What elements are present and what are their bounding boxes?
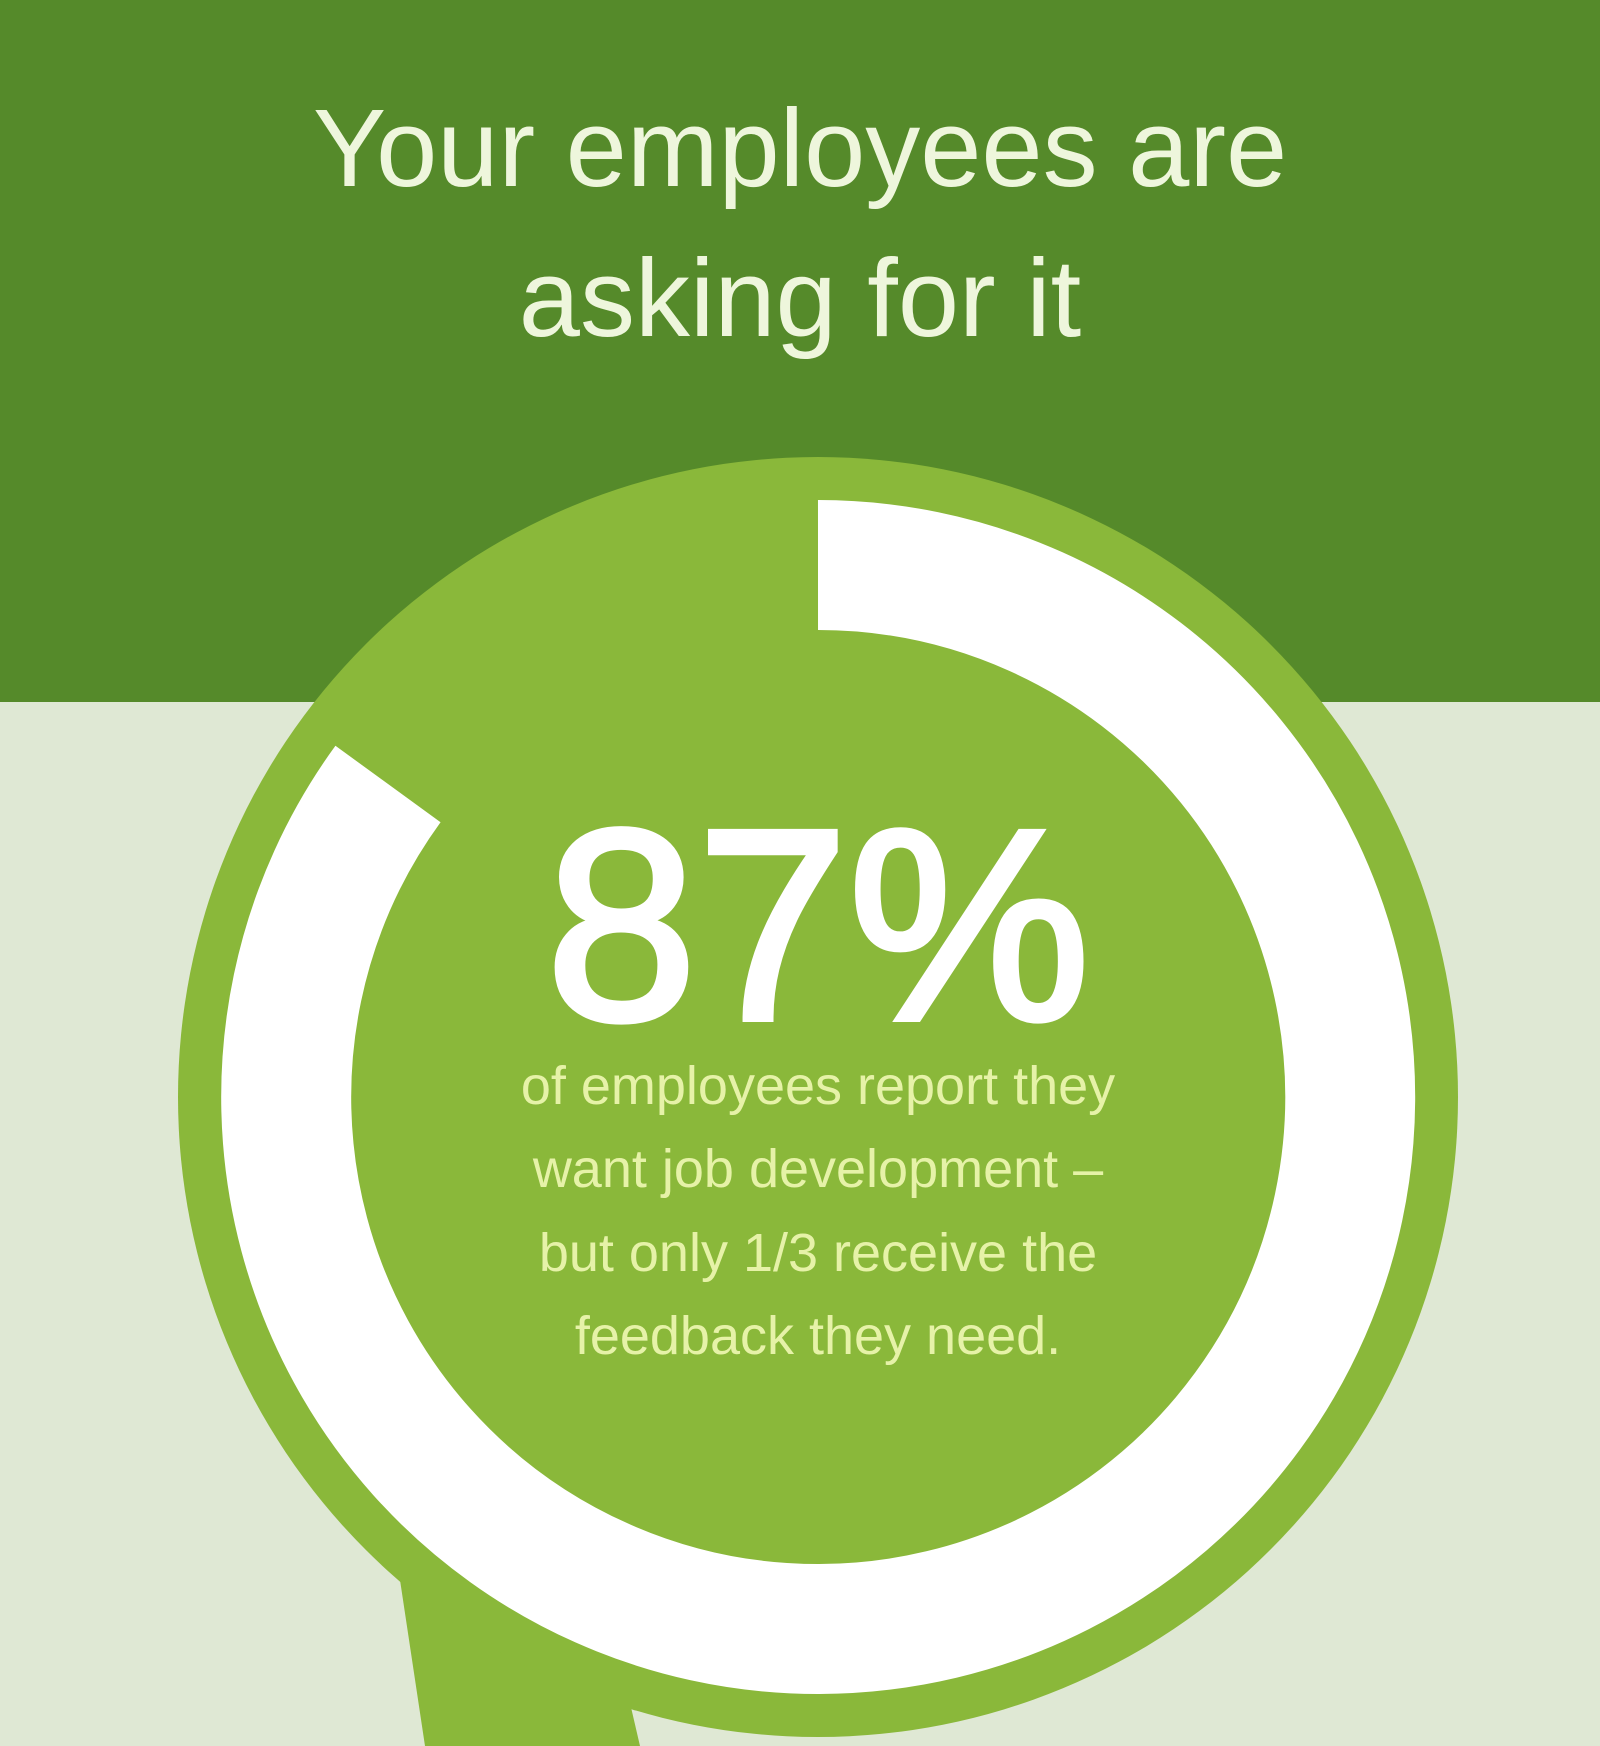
bubble tail <box>400 1580 640 1746</box>
description text: of employees report they <box>521 1056 1115 1116</box>
progress ring 87% <box>286 565 1350 1629</box>
title <box>313 87 1287 360</box>
speech bubble with stat <box>178 457 1458 1746</box>
description text <box>521 1056 1115 1366</box>
bubble circle <box>178 457 1458 1737</box>
title: Your employees are <box>313 87 1287 210</box>
description text: want job development – <box>532 1139 1103 1199</box>
header band <box>0 0 1600 702</box>
big number: 87% <box>546 773 1090 1077</box>
description text: but only 1/3 receive the <box>539 1223 1097 1283</box>
description text: feedback they need. <box>575 1306 1061 1366</box>
title: asking for it <box>519 237 1081 360</box>
